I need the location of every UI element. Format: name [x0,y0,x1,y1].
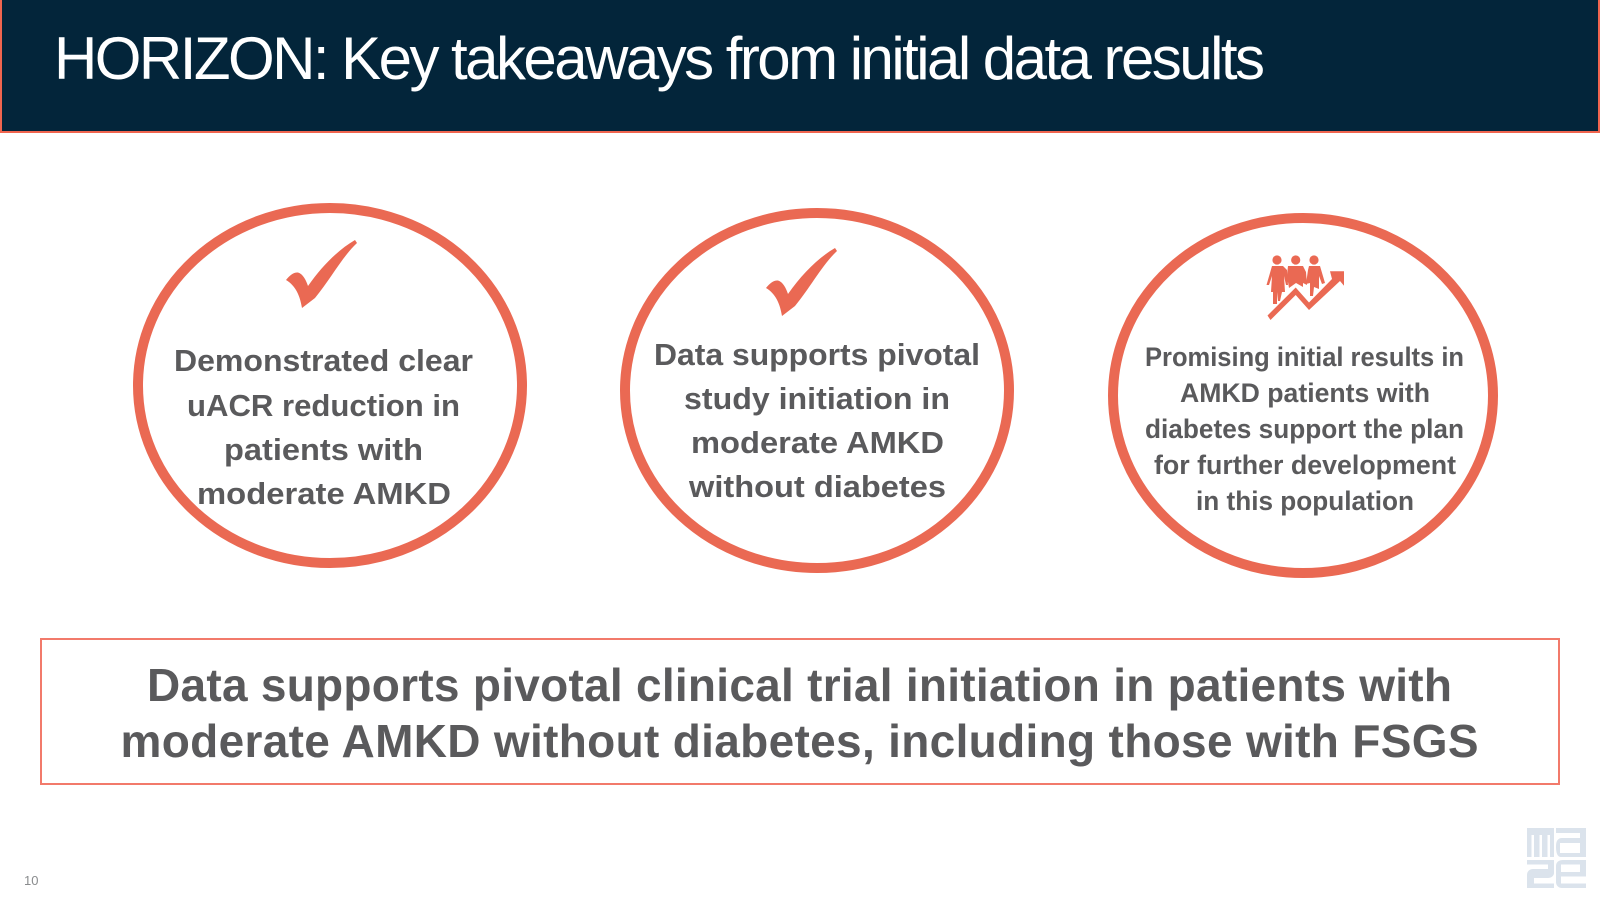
callout: conclusion [41,639,1559,784]
text: takeaway 1: patients with [224,432,423,467]
text: takeaway 3: AMKD patients with [1180,378,1430,408]
panel: takeaway 2 [625,213,1009,568]
callout: conclusion: Data supports pivotal clinical trial initiation in patients with [147,659,1452,711]
text: takeaway 2 [654,337,980,504]
icon: check mark 1 [286,240,357,308]
icon: check mark 2 [766,248,837,316]
text: takeaway 3 [1145,342,1464,516]
text: takeaway 1: uACR reduction in [187,388,460,423]
text: takeaway 3: for further development [1154,450,1456,480]
logo: maze [1527,828,1586,888]
text: takeaway 2: study initiation in [684,381,950,416]
icon: people with rising arrow [1266,255,1344,320]
text: takeaway 1: moderate AMKD [197,476,451,511]
title: HORIZON: Key takeaways from initial data results [54,25,1265,92]
text: takeaway 3: diabetes support the plan [1145,414,1464,444]
text: takeaway 2: Data supports pivotal [654,337,980,372]
text: takeaway 3: Promising initial results in [1145,342,1464,372]
text: takeaway 2: moderate AMKD [691,425,944,460]
callout: conclusion: moderate AMKD without diabetes, including those with FSGS [120,715,1478,767]
panel: takeaway 3 [1113,218,1493,573]
text: takeaway 3: in this population [1196,486,1414,516]
page number: 10 [24,873,38,888]
header banner [1,0,1599,132]
panel: takeaway 1 [138,208,522,563]
text: takeaway 2: without diabetes [688,469,946,504]
text: takeaway 1: Demonstrated clear [174,343,473,378]
text: takeaway 1 [174,343,473,511]
